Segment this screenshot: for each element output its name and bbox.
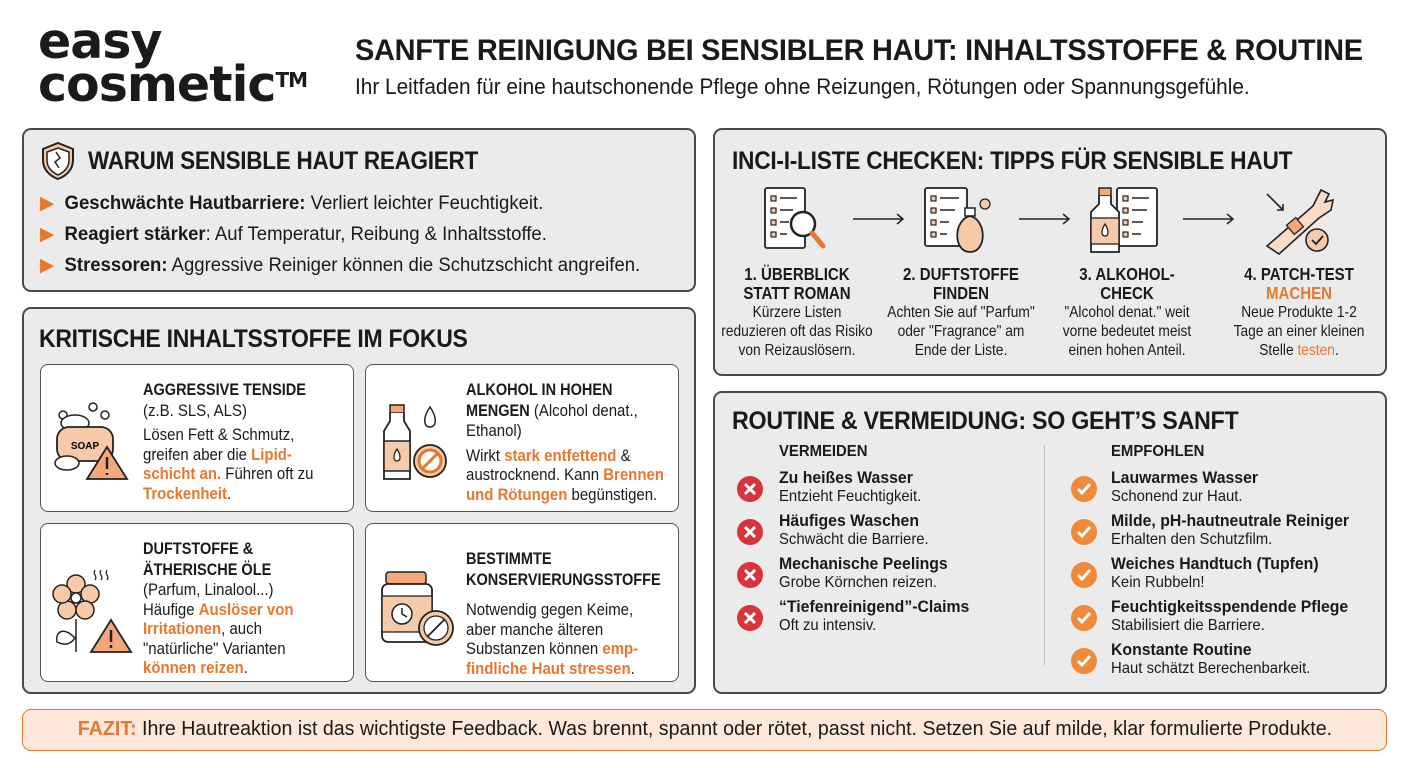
column: vermeiden bbox=[737, 443, 969, 634]
icon: patch test arm bbox=[1266, 188, 1334, 255]
step 2: Achten Sie auf "Parfum" bbox=[887, 304, 1035, 321]
arrow bbox=[1183, 214, 1234, 225]
step 4 bbox=[1234, 264, 1364, 359]
icon: list perfume bbox=[924, 187, 991, 253]
column: vermeiden: Zu heißes Wasser bbox=[779, 468, 913, 487]
card text: Ethanol) bbox=[466, 421, 522, 440]
column: empfohlen: Weiches Handtuch (Tupfen) bbox=[1111, 554, 1319, 573]
logo: easy bbox=[38, 13, 161, 70]
step 1: STATT ROMAN bbox=[743, 283, 851, 303]
card text: und Rötungen begünstigen. bbox=[466, 484, 657, 504]
card text: schicht an. Führen oft zu bbox=[143, 464, 313, 483]
icon: soap bbox=[54, 402, 128, 480]
column: empfohlen: Stabilisiert die Barriere. bbox=[1111, 617, 1265, 634]
card text: AGGRESSIVE TENSIDE bbox=[143, 381, 306, 399]
card text: (z.B. SLS, ALS) bbox=[143, 400, 247, 420]
card text: DUFTSTOFFE & bbox=[143, 540, 253, 558]
column: empfohlen: Lauwarmes Wasser bbox=[1111, 468, 1258, 487]
column: empfohlen: Haut schätzt Berechenbarkeit. bbox=[1111, 660, 1310, 677]
heading: WARUM SENSIBLE HAUT REAGIERT bbox=[88, 147, 478, 175]
bullet list: ▶ Stressoren: Aggressive Reiniger können die Schutzschicht angreifen. bbox=[40, 255, 640, 276]
card text: greifen aber die Lipid- bbox=[143, 444, 292, 464]
subtitle: Ihr Leitfaden für eine hautschonende Pflege ohne Reizungen, Rötungen oder Spannungsgefühle. bbox=[355, 74, 1250, 99]
card text: Irritationen, auch bbox=[143, 619, 262, 638]
icon: alcohol list bbox=[1090, 187, 1158, 253]
column: vermeiden: Mechanische Peelings bbox=[779, 554, 948, 573]
step 4: 4. PATCH-TEST bbox=[1244, 264, 1354, 284]
column: empfohlen: Konstante Routine bbox=[1111, 640, 1252, 659]
bullet list: ▶ Reagiert stärker: Auf Temperatur, Reibung & Inhaltsstoffe. bbox=[40, 224, 547, 245]
heading: KRITISCHE INHALTSSTOFFE IM FOKUS bbox=[39, 325, 468, 353]
logo: cosmeticTM bbox=[38, 56, 307, 113]
step 4: Stelle testen. bbox=[1259, 342, 1339, 359]
card text: austrocknend. Kann Brennen bbox=[466, 465, 664, 484]
step 2: 2. DUFTSTOFFE bbox=[903, 264, 1019, 284]
card text: aber manche älteren bbox=[466, 620, 603, 638]
card text: ÄTHERISCHE ÖLE bbox=[143, 560, 271, 578]
step 3: CHECK bbox=[1100, 283, 1154, 303]
column: vermeiden: Entzieht Feuchtigkeit. bbox=[779, 488, 921, 505]
logo bbox=[38, 13, 307, 113]
panel: kritische inhaltsstoffe bbox=[22, 307, 696, 694]
step 4: Neue Produkte 1-2 bbox=[1241, 304, 1357, 321]
bullet list bbox=[40, 193, 640, 276]
card text bbox=[466, 550, 661, 678]
fazit bar: FAZIT: Ihre Hautreaktion ist das wichtigste Feedback. Was brennt, spannt oder rötet, passt nicht. Setzen Sie auf milde, klar formulierte Produkte. bbox=[77, 718, 1332, 740]
bullet list: ▶ Geschwächte Hautbarriere: Verliert leichter Feuchtigkeit. bbox=[40, 193, 543, 214]
column: vermeiden: Häufiges Waschen bbox=[779, 511, 919, 530]
step 2: FINDEN bbox=[933, 283, 989, 303]
column: empfohlen: Erhalten den Schutzfilm. bbox=[1111, 531, 1272, 548]
panel: inci bbox=[713, 128, 1387, 376]
card text: MENGEN (Alcohol denat., bbox=[466, 400, 638, 420]
step 4: Tage an einer kleinen bbox=[1234, 323, 1364, 340]
column: vermeiden: Schwächt die Barriere. bbox=[779, 531, 929, 548]
card text: können reizen. bbox=[143, 658, 248, 677]
arrow bbox=[1019, 214, 1070, 225]
step 1: von Reizauslösern. bbox=[738, 342, 856, 359]
column: empfohlen: Kein Rubbeln! bbox=[1111, 574, 1204, 591]
column: vermeiden: VERMEIDEN bbox=[779, 443, 867, 460]
icon: jar bbox=[381, 571, 454, 646]
card text: BESTIMMTE bbox=[466, 550, 552, 568]
icon: list magnifier bbox=[764, 187, 826, 249]
column: vermeiden: “Tiefenreinigend”-Claims bbox=[779, 597, 969, 616]
card: duftstoffe bbox=[40, 523, 354, 682]
heading: INCI-I-LISTE CHECKEN: TIPPS FÜR SENSIBLE HAUT bbox=[732, 147, 1292, 175]
step 3: "Alcohol denat." weit bbox=[1064, 304, 1190, 321]
step 2: oder "Fragrance" am bbox=[898, 323, 1024, 340]
step 2 bbox=[887, 264, 1035, 359]
step 1: reduzieren oft das Risiko bbox=[721, 323, 873, 340]
card text bbox=[466, 381, 664, 504]
fazit bar bbox=[22, 709, 1387, 751]
step 2: Ende der Liste. bbox=[915, 342, 1007, 359]
panel: routine bbox=[713, 391, 1387, 694]
step 1: Kürzere Listen bbox=[753, 304, 841, 321]
column: vermeiden: Oft zu intensiv. bbox=[779, 617, 876, 634]
heading: ROUTINE & VERMEIDUNG: SO GEHT’S SANFT bbox=[732, 407, 1238, 435]
card text: findliche Haut stressen. bbox=[466, 658, 635, 678]
title: SANFTE REINIGUNG BEI SENSIBLER HAUT: INHALTSSTOFFE & ROUTINE bbox=[355, 34, 1363, 67]
icon: shield bbox=[42, 142, 74, 180]
icon: bottle bbox=[383, 404, 447, 480]
icon: soap: SOAP bbox=[71, 441, 99, 452]
step 3: 3. ALKOHOL- bbox=[1079, 264, 1175, 284]
column: empfohlen bbox=[1071, 443, 1349, 677]
card text: ALKOHOL IN HOHEN bbox=[466, 381, 613, 399]
card text: Substanzen können emp- bbox=[466, 639, 638, 658]
step 3 bbox=[1062, 264, 1192, 359]
panel: warum bbox=[22, 128, 696, 292]
card text bbox=[143, 381, 313, 502]
column: vermeiden: Grobe Körnchen reizen. bbox=[779, 574, 937, 591]
column: empfohlen: Milde, pH-hautneutrale Reiniger bbox=[1111, 511, 1349, 530]
column: empfohlen: EMPFOHLEN bbox=[1111, 443, 1204, 460]
card text: Wirkt stark entfettend & bbox=[466, 446, 631, 464]
card text: Trockenheit. bbox=[143, 484, 231, 502]
card text: "natürliche" Varianten bbox=[143, 638, 286, 658]
step 1: 1. ÜBERBLICK bbox=[744, 264, 850, 284]
card text: (Parfum, Linalool...) bbox=[143, 580, 274, 599]
step 3: vorne bedeutet meist bbox=[1063, 323, 1191, 340]
card text: Häufige Auslöser von bbox=[143, 600, 294, 618]
card text: Notwendig gegen Keime, bbox=[466, 600, 633, 619]
card: alkohol bbox=[365, 364, 679, 512]
card: konservierung bbox=[365, 523, 679, 682]
step 4: MACHEN bbox=[1266, 283, 1332, 303]
card text: Lösen Fett & Schmutz, bbox=[143, 425, 294, 444]
card: tenside bbox=[40, 364, 354, 512]
divider bbox=[1044, 445, 1045, 665]
column: empfohlen: Schonend zur Haut. bbox=[1111, 488, 1243, 505]
step 3: einen hohen Anteil. bbox=[1068, 342, 1186, 359]
icon: flower bbox=[52, 570, 132, 653]
card text bbox=[143, 540, 294, 677]
card text: KONSERVIERUNGSSTOFFE bbox=[466, 570, 661, 588]
step 1 bbox=[721, 264, 873, 359]
arrow bbox=[853, 214, 904, 225]
column: empfohlen: Feuchtigkeitsspendende Pflege bbox=[1111, 597, 1348, 616]
